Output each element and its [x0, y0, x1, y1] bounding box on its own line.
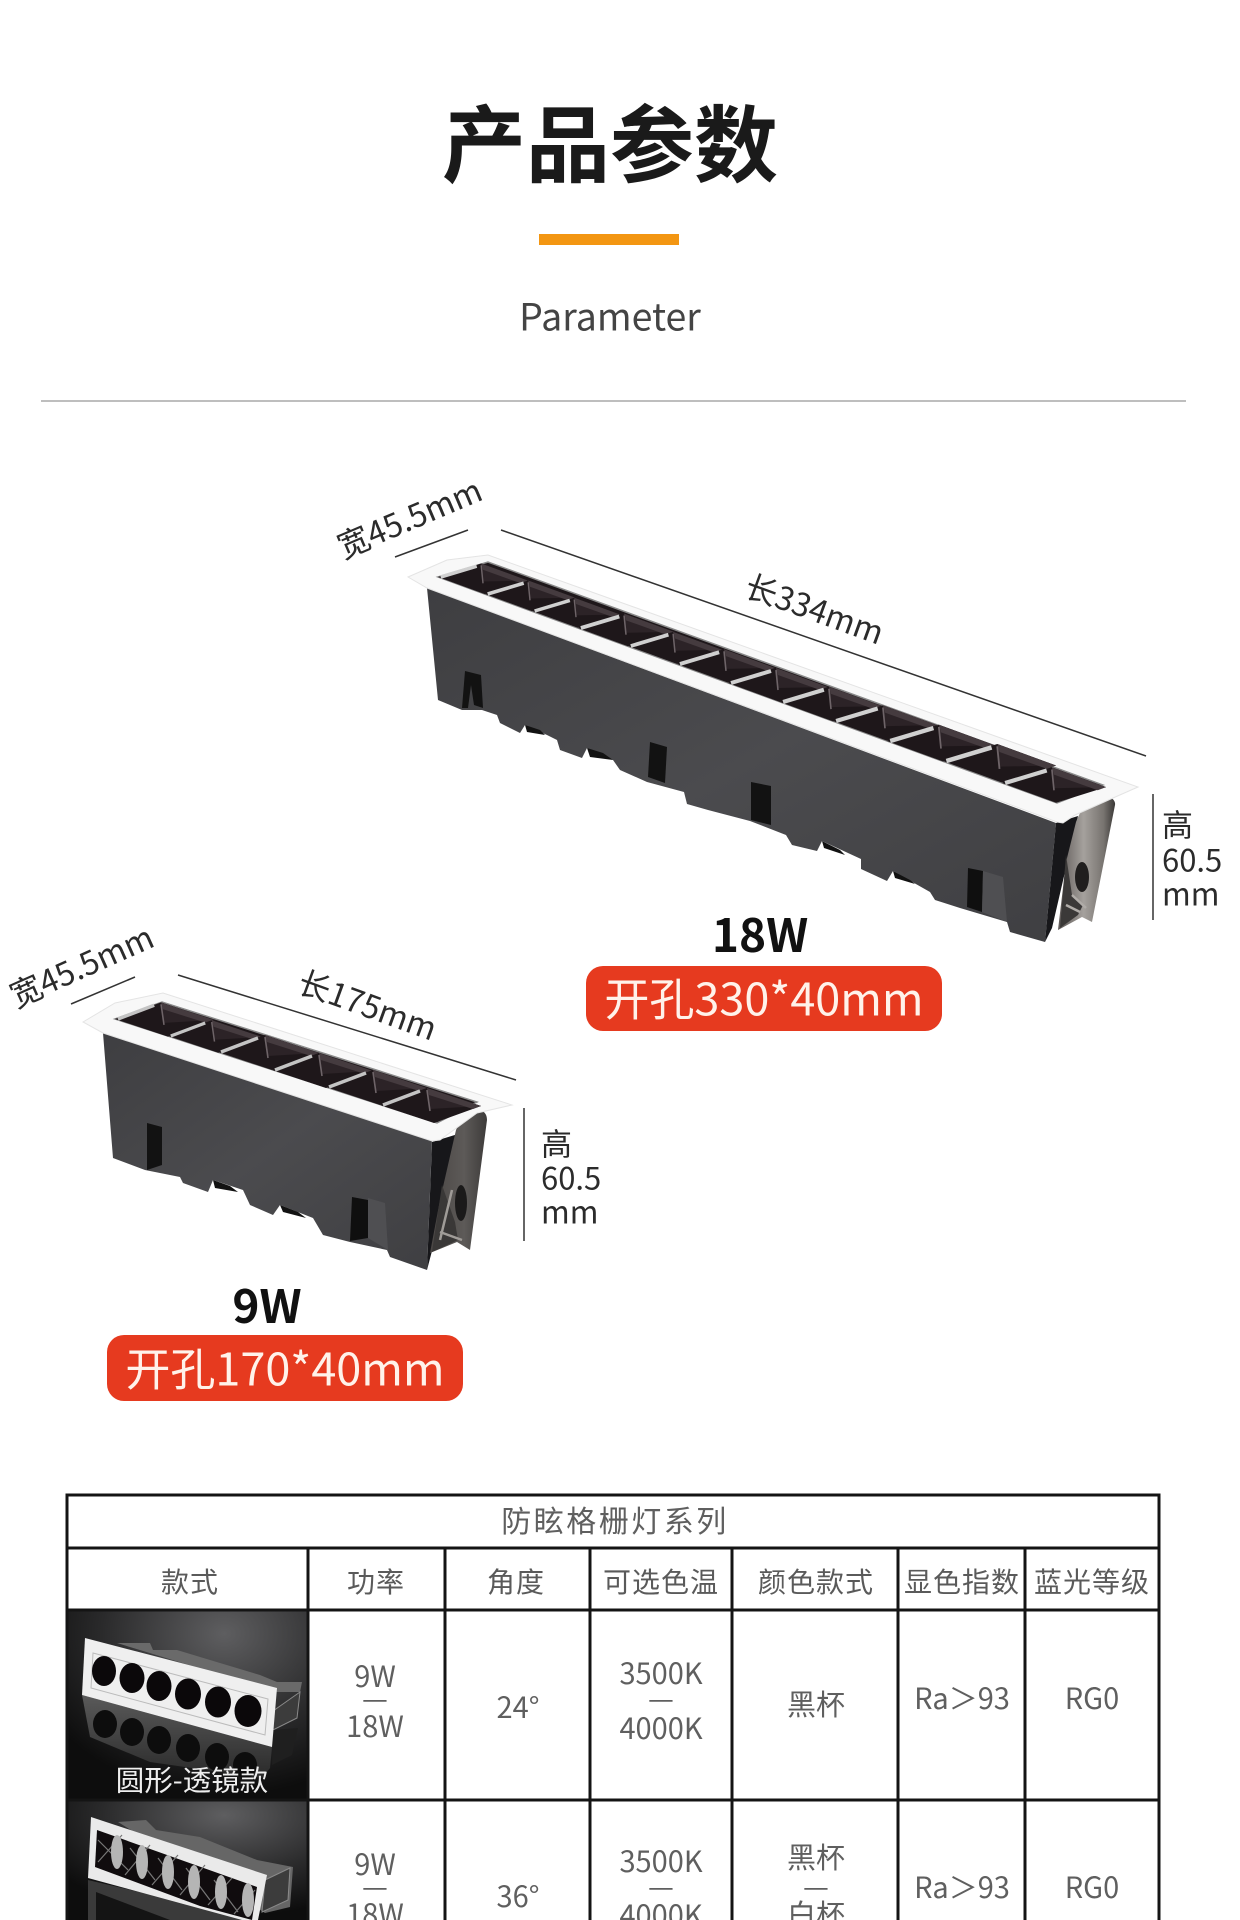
table header row: 款式 — [161, 1561, 219, 1601]
table row 1 values: — — [362, 1676, 388, 1718]
length dimension 9W — [178, 958, 516, 1080]
height dimension 18W: 60.5 — [1162, 836, 1222, 880]
table grid lines — [67, 1495, 1159, 1920]
table row 2 values: 9W — [354, 1842, 396, 1884]
row 1 product image — [68, 1611, 308, 1801]
height dimension 9W — [524, 1108, 601, 1241]
table row 2 values: — — [648, 1864, 674, 1906]
height dimension 9W: 高 — [541, 1120, 572, 1164]
table header row: 角度 — [487, 1561, 545, 1601]
table row 1 values: RG0 — [1065, 1676, 1119, 1718]
row 1 image caption: 圆形-透镜款 — [116, 1758, 268, 1800]
table title: 防眩格栅灯系列 — [501, 1497, 729, 1541]
9W label: 9W — [232, 1271, 302, 1337]
table row 1 values: 黑杯 — [787, 1682, 845, 1724]
9W lamp drawing — [83, 993, 512, 1270]
width dimension 9W: 宽45.5mm — [2, 913, 160, 1017]
length dimension 18W: 长334mm — [739, 562, 891, 654]
table row 1 values: 24° — [497, 1685, 539, 1727]
length dimension 18W — [501, 530, 1146, 756]
table header row: 显色指数 — [904, 1561, 1020, 1601]
specification table — [67, 1495, 1159, 1920]
height dimension 9W: mm — [541, 1188, 598, 1232]
table header row: 可选色温 — [603, 1561, 719, 1601]
width dimension 18W: 宽45.5mm — [329, 466, 489, 568]
table row 2 values: 黑杯 — [787, 1835, 845, 1877]
table row 2 values: — — [803, 1864, 829, 1906]
subtitle: Parameter — [519, 286, 701, 342]
height dimension 9W: 60.5 — [541, 1154, 601, 1198]
table header row: 功率 — [347, 1561, 405, 1601]
table header row: 蓝光等级 — [1034, 1561, 1150, 1601]
height dimension 18W: 高 — [1162, 800, 1193, 846]
table row 2 values — [346, 1835, 1119, 1920]
height dimension 18W — [1153, 794, 1222, 920]
18W lamp drawing — [408, 555, 1138, 942]
table row 1 values — [346, 1651, 1119, 1748]
table header row: 颜色款式 — [758, 1561, 874, 1601]
table row 1 values: 9W — [354, 1654, 396, 1696]
height dimension 18W: mm — [1162, 870, 1219, 914]
table row 2 values: — — [362, 1864, 388, 1906]
table row 1 values: 18W — [346, 1704, 404, 1746]
cutout badge 9W: 开孔170*40mm — [125, 1334, 445, 1398]
title: 产品参数 — [442, 80, 778, 200]
table row 1 values: 4000K — [619, 1706, 703, 1748]
18W label: 18W — [712, 900, 808, 966]
table header row — [161, 1561, 1150, 1601]
row 2 product image — [68, 1801, 308, 1920]
product: 9W lamp with dimensions — [2, 913, 601, 1401]
product: 18W lamp with dimensions — [329, 466, 1222, 1031]
table row 2 values: 36° — [497, 1874, 539, 1916]
length dimension 9W: 长175mm — [292, 958, 444, 1050]
table row 1 values: — — [648, 1676, 674, 1718]
table row 2 values: RG0 — [1065, 1865, 1119, 1907]
table row 2 values: Ra＞93 — [914, 1865, 1010, 1907]
table row 1 values: 3500K — [619, 1651, 703, 1693]
cutout badge 18W: 开孔330*40mm — [604, 964, 924, 1028]
orange accent bar — [539, 234, 679, 245]
table row 2 values: 3500K — [619, 1839, 703, 1881]
table row 1 values: Ra＞93 — [914, 1676, 1010, 1718]
